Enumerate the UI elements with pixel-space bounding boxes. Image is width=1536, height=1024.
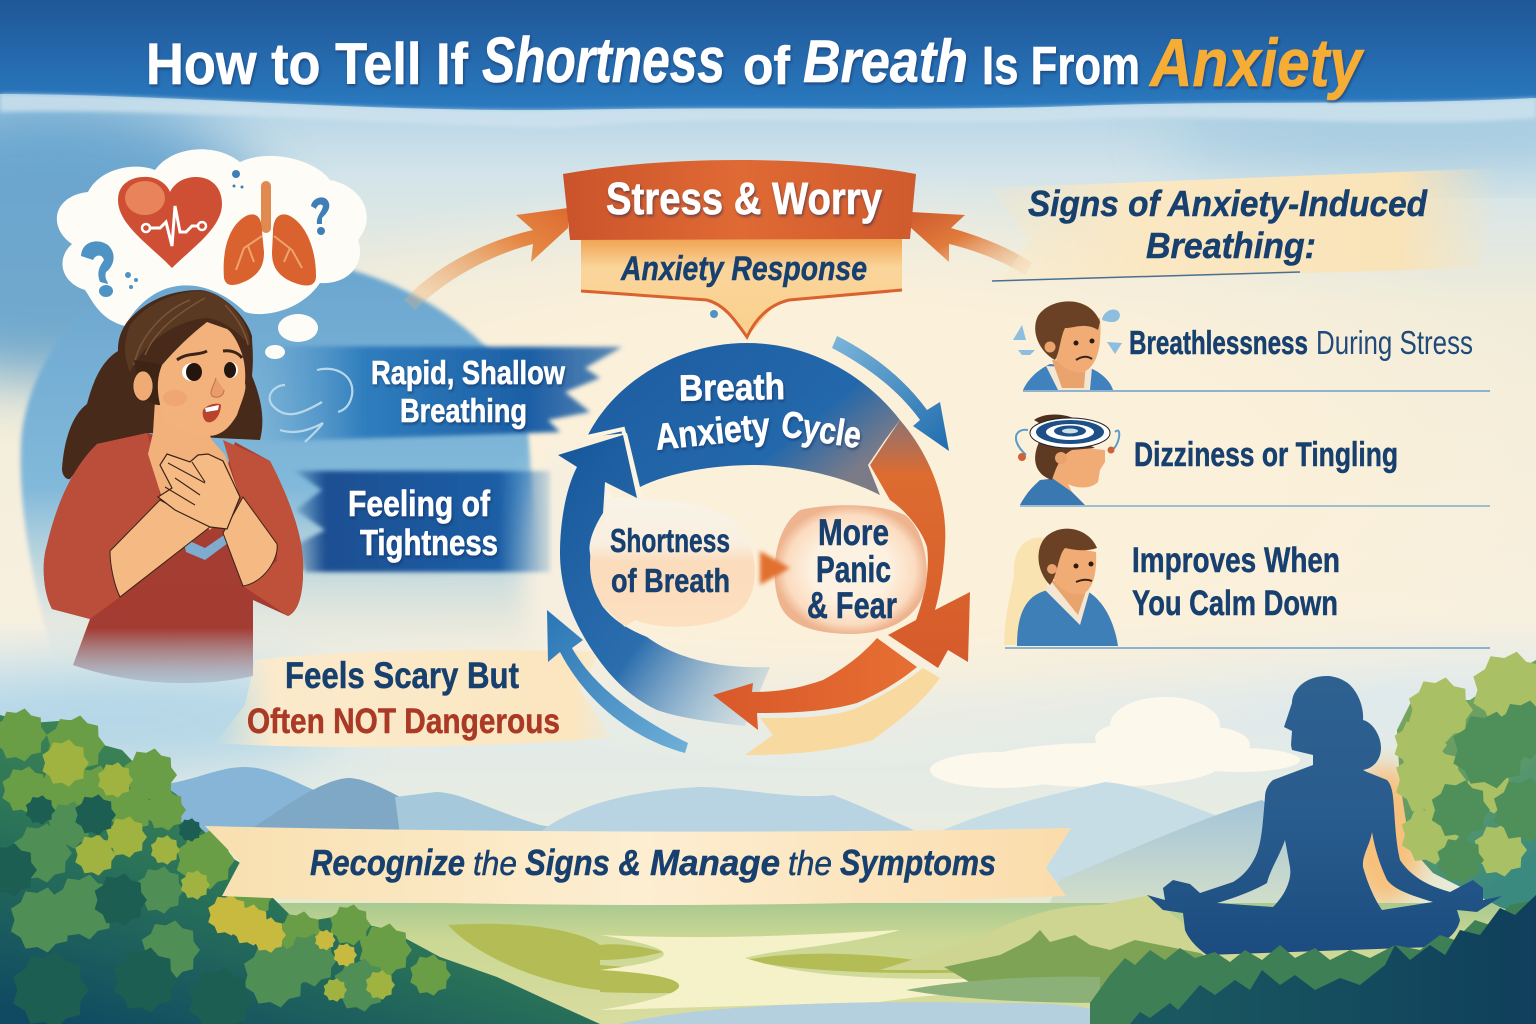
right sky blue wash [1160, 100, 1536, 170]
sign row 1: breathlessness during stress: During Stress [1316, 324, 1473, 361]
face [158, 322, 245, 436]
thought cloud [57, 149, 367, 359]
bottom foliage right [1090, 895, 1536, 1024]
sign row 3: improves when you calm down: You Calm Down [1132, 584, 1338, 623]
hands [158, 454, 240, 529]
sign row 3: improves when you calm down [1004, 529, 1340, 646]
white edge left arrowhead [587, 429, 640, 497]
orange glow behind silhouette [1345, 765, 1425, 905]
ribbon: feels scary but often not dangerous: Often NOT Dangerous [247, 702, 560, 741]
neckline trim [183, 533, 228, 560]
ribbon: feeling of tightness: Tightness [360, 522, 498, 563]
stress banner shape [563, 160, 916, 240]
ribbon: rapid shallow breathing: Rapid, Shallow [371, 354, 565, 391]
ribbon: recognize the signs: Signs & [525, 842, 641, 883]
lower left thin arrow [547, 610, 688, 753]
bubble: more panic and fear: Panic [816, 549, 891, 590]
eyebrows [177, 351, 242, 360]
title: Shortness [482, 24, 725, 96]
hill right side fade [523, 445, 607, 695]
anxiety response box: Anxiety Response [620, 250, 867, 288]
ribbon: recognize the signs: Manage [650, 842, 780, 883]
blue left arc arrow [558, 435, 770, 726]
left sky blue wash [0, 100, 280, 380]
olive field patches [448, 924, 985, 993]
sign row 1: breathlessness during stress [1013, 301, 1473, 390]
left curved arrow [404, 208, 568, 310]
title banner [0, 0, 1536, 128]
title [146, 24, 1365, 101]
icon: left question mark [81, 241, 138, 297]
ribbon: rapid shallow breathing: Breathing [400, 392, 527, 429]
ribbon: recognize the signs: the [473, 845, 517, 883]
forearm left [110, 500, 210, 597]
cheeks [163, 390, 187, 406]
background shrubs right [880, 895, 1190, 970]
person icon 2 [1016, 415, 1119, 505]
hair crown highlight [125, 291, 250, 372]
river [620, 1002, 1130, 1024]
signs heading: Signs of Anxiety-Induced [1028, 183, 1428, 224]
top right thin arrow [832, 336, 949, 451]
blue top arc [587, 343, 900, 495]
sign row 2: dizziness or tingling [1016, 415, 1398, 505]
cream lower band [745, 668, 940, 755]
mouth [203, 404, 221, 422]
bubble: more panic and fear: More [818, 512, 889, 553]
forearm right [223, 497, 277, 586]
signs heading: Breathing: [1146, 225, 1316, 266]
sign row 2: dizziness or tingling: Dizziness or Tingling [1134, 436, 1398, 474]
bubble: more panic and fear: & Fear [807, 585, 897, 626]
divider 1 [1023, 390, 1490, 392]
title: How to Tell If [146, 32, 469, 97]
ribbon: feels scary but often not dangerous: Feels Scary But [285, 655, 519, 696]
ribbon: recognize the signs [205, 826, 1071, 905]
bubble: shortness of breath [590, 483, 755, 627]
blue hill behind woman [21, 255, 548, 680]
person icon 3 [1004, 529, 1118, 646]
stress and worry banner: Stress & Worry [606, 173, 882, 224]
lower left sky blue wash [0, 670, 340, 770]
trees right [1395, 652, 1536, 920]
sign row 3: improves when you calm down: Improves When [1132, 541, 1340, 580]
ground fields [150, 903, 1536, 1024]
sweater left sleeve [44, 433, 160, 619]
hair back [62, 290, 262, 479]
icon: heart [118, 177, 222, 268]
breath lines [270, 369, 352, 442]
right curved arrow [910, 212, 1032, 275]
ribbon: recognize the signs: Recognize [310, 842, 465, 883]
orange lower arrow [713, 638, 917, 730]
sign row 1: breathlessness during stress: Breathlessness [1129, 324, 1308, 361]
title: Breath [803, 28, 968, 95]
stress and worry banner [404, 160, 1032, 337]
ribbon: recognize the signs: Symptoms [840, 842, 996, 883]
sweater torso [44, 433, 303, 683]
cycle heading: Anxiety [653, 405, 772, 458]
hair behind ear [134, 360, 164, 405]
ribbon: feeling of tightness: Feeling of [348, 483, 491, 524]
neck and chest [148, 400, 240, 530]
title: Anxiety [1148, 25, 1365, 101]
arrow between bubbles [760, 551, 790, 585]
divider 3 [1005, 647, 1490, 649]
bubble: more panic and fear [775, 505, 927, 634]
person icon 1 [1013, 301, 1122, 390]
lens green patch [906, 977, 1100, 1003]
title: Is From [982, 36, 1140, 96]
nose [211, 378, 224, 397]
ribbon: rapid shallow breathing [255, 346, 622, 442]
anxiety response box [581, 238, 902, 337]
icon: right question mark [232, 170, 329, 235]
divider 2 [1020, 505, 1490, 507]
bubble: shortness of breath: Shortness [610, 522, 730, 559]
icon: lungs [224, 186, 316, 286]
sweater right sleeve [223, 440, 303, 616]
green shrub band [944, 930, 1260, 1000]
trees left [0, 708, 600, 1024]
ear [133, 371, 153, 401]
clouds [930, 697, 1300, 788]
ribbon: feeling of tightness [295, 471, 550, 572]
mountains [140, 767, 1300, 925]
winding path [600, 930, 1140, 1010]
signs heading [990, 168, 1500, 282]
cycle heading: Breath [679, 366, 785, 409]
orange right arc [870, 420, 970, 668]
meditating silhouette [1147, 676, 1502, 955]
cycle heading: Cycle [779, 403, 864, 456]
hair strands [134, 298, 248, 365]
cycle heading [653, 366, 864, 458]
finger lines [165, 462, 205, 505]
bubble: shortness of breath: of Breath [611, 562, 730, 599]
woman [44, 290, 352, 683]
cycle diagram [547, 336, 970, 755]
ribbon: recognize the signs: the [788, 845, 832, 883]
ribbon: feels scary but often not dangerous [215, 650, 612, 747]
background cream glow [30, 170, 1536, 770]
eyes [182, 363, 202, 381]
title: of [743, 36, 791, 96]
